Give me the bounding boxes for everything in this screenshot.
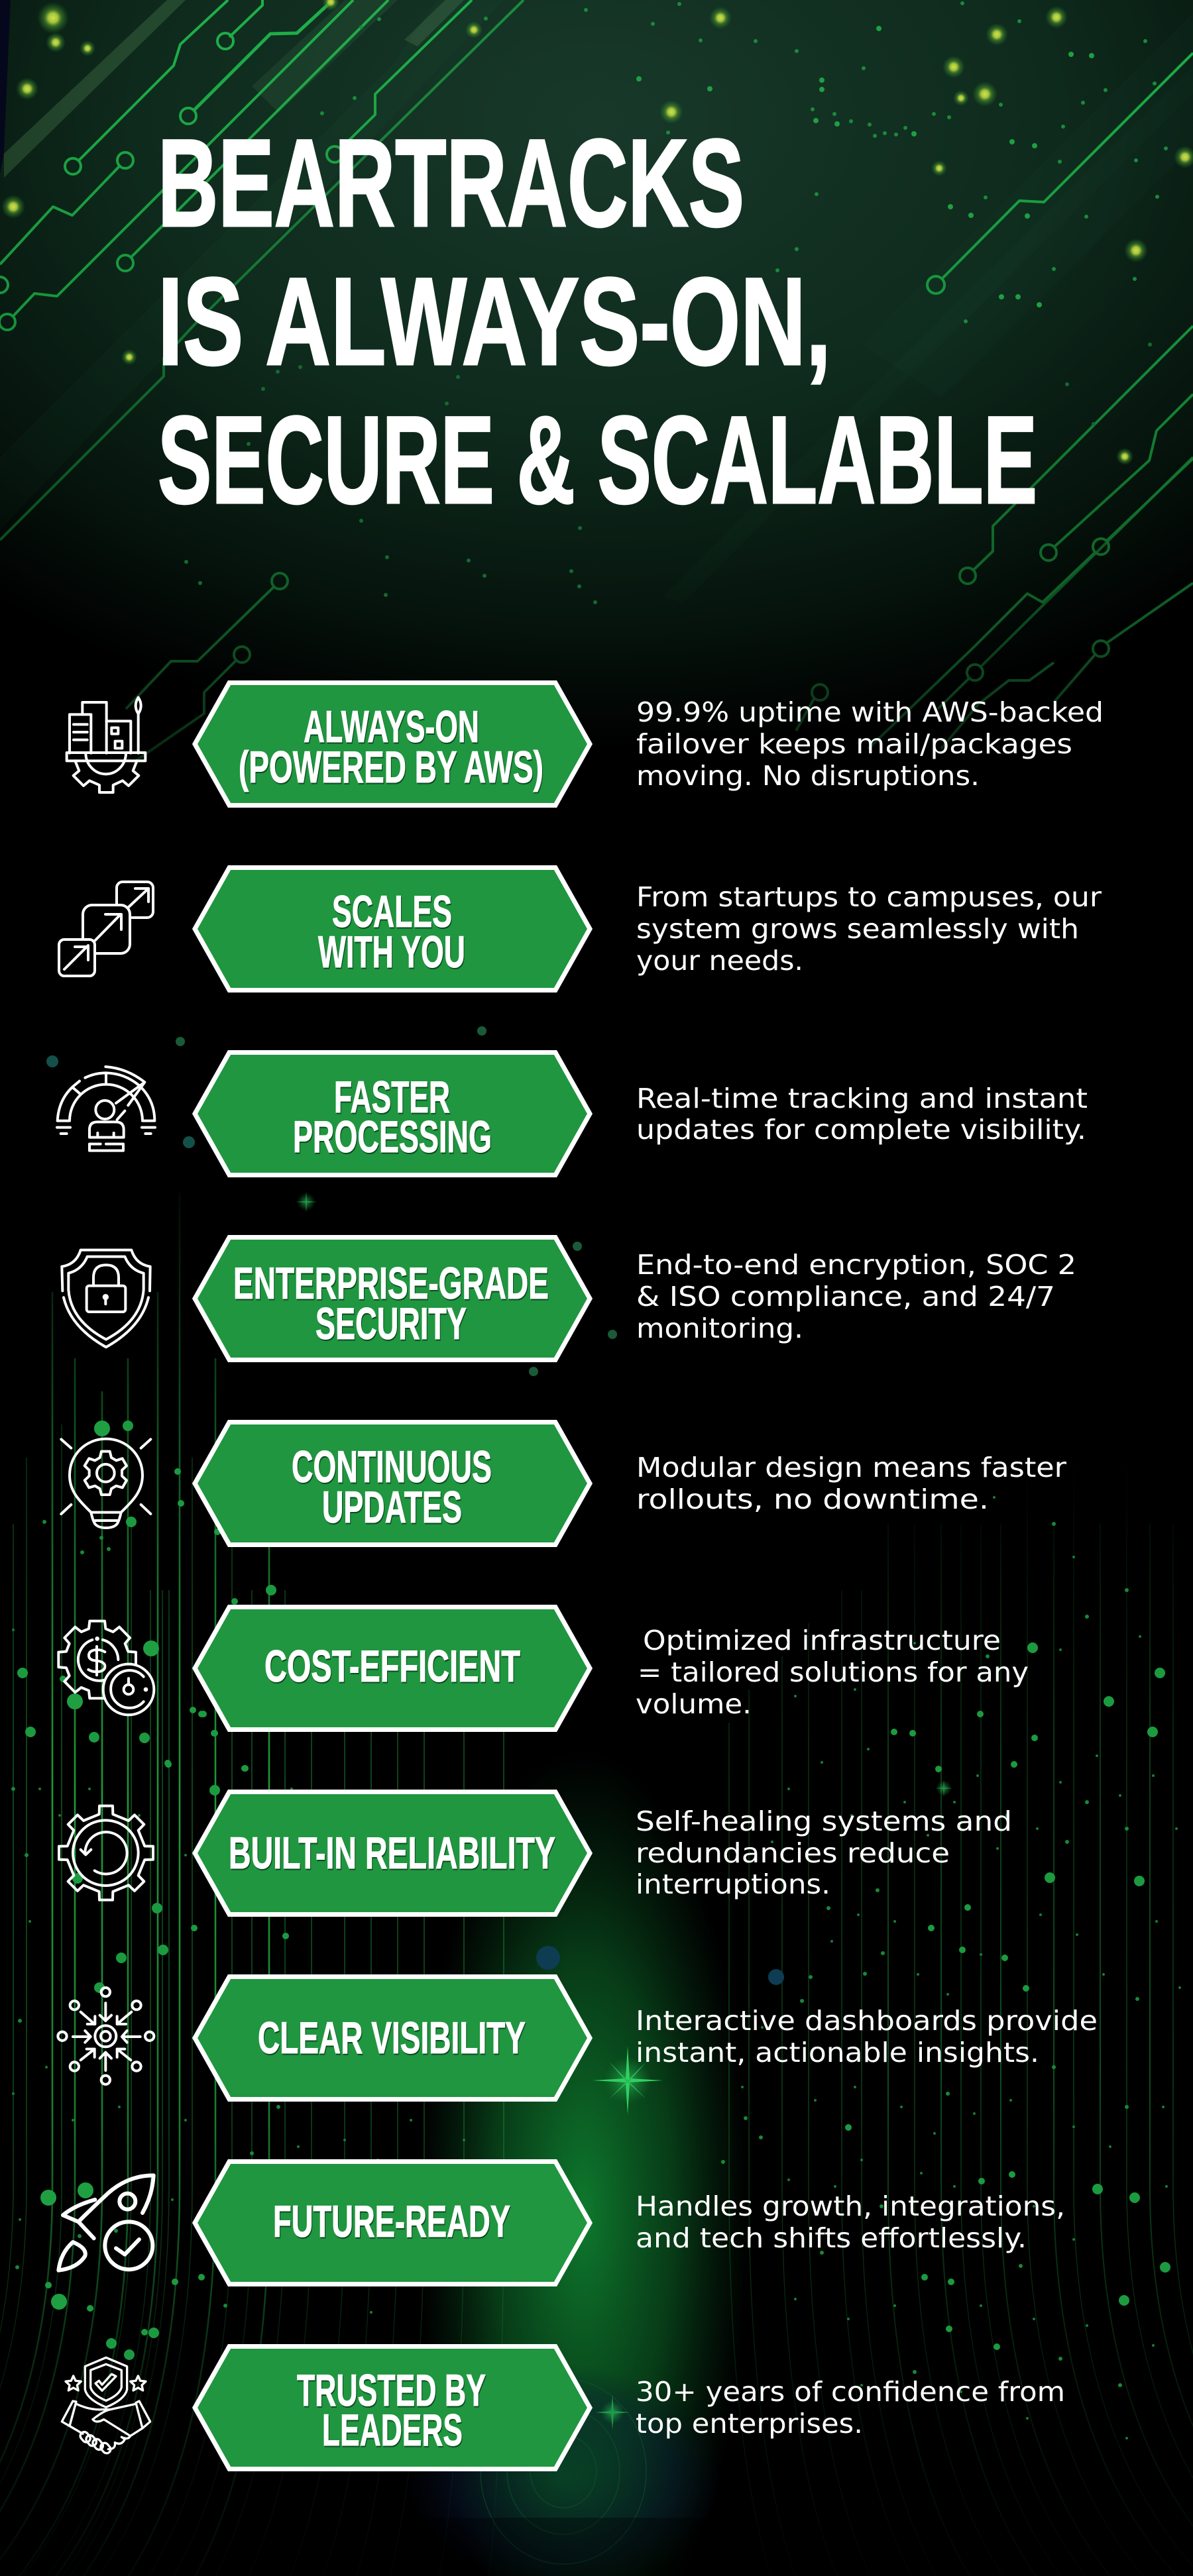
badge: WITH YOU [318,927,465,977]
description: Interactive dashboards provide [636,2005,1098,2037]
description: instant, actionable insights. [636,2037,1039,2068]
description: From startups to campuses, our [636,881,1102,913]
icon: shield with padlock [62,1250,150,1347]
icon: rocket with check badge [58,2175,154,2271]
row: faster processing [57,1052,1088,1175]
description: 99.9% uptime with AWS-backed [636,696,1104,728]
icon: factory on gear [67,698,145,792]
description: Modular design means faster [636,1452,1066,1483]
badge: (POWERED BY AWS) [239,742,543,792]
description [636,1805,1012,1900]
badge: BUILT-IN RELIABILITY [229,1828,555,1878]
description: Real-time tracking and instant [636,1083,1088,1114]
description [636,1249,1076,1344]
row: continuous updates [61,1422,1066,1545]
badge [195,1607,590,1729]
background: particles, lower section [13,1031,1180,2438]
description: system grows seamlessly with [636,913,1079,945]
badge [195,1052,590,1175]
badge [195,682,590,806]
badge: SECURITY [315,1299,467,1349]
description: redundancies reduce [636,1837,950,1869]
background: circuit traces and nodes [0,0,1193,761]
description [636,1452,1066,1515]
description [636,2005,1098,2068]
background: green sparkle stars [296,1191,952,2430]
background: glowing particles, top section [1,0,1193,602]
icon: converging arrows to target [58,1988,154,2084]
title: IS ALWAYS-ON, [158,252,831,391]
description: your needs. [636,945,803,977]
description: Self-healing systems and [636,1805,1012,1837]
icon: shield, stars and handshake [62,2357,150,2455]
title [158,113,1037,529]
badge: TRUSTED BY [297,2365,486,2416]
description: updates for complete visibility. [636,1114,1086,1146]
row: trusted by leaders [62,2347,1065,2469]
row: enterprise-grade security [62,1238,1076,1360]
row: always-on [67,682,1104,806]
description: Handles growth, integrations, [636,2190,1065,2222]
description: 30+ years of confidence from [636,2376,1065,2408]
row: built-in reliability [59,1792,1012,1915]
badge [195,1977,590,2099]
description [636,1083,1088,1146]
description: & ISO compliance, and 24/7 [636,1281,1055,1313]
badge [195,1238,590,1360]
description: rollouts, no downtime. [636,1483,989,1515]
icon: expanding squares [59,882,153,976]
badge [195,1792,590,1915]
row: cost-efficient [58,1607,1029,1729]
description [636,696,1104,792]
description [636,1625,1029,1720]
badge: FASTER [334,1072,450,1122]
description: and tech shifts effortlessly. [636,2222,1027,2254]
badge: SCALES [332,886,452,937]
description: top enterprises. [636,2408,863,2440]
badge: UPDATES [322,1482,462,1532]
icon: gear with dollar and gauge [58,1621,154,1715]
description: interruptions. [636,1868,830,1900]
description: = tailored solutions for any [638,1656,1029,1688]
badge: FUTURE-READY [273,2196,510,2247]
description: Optimized infrastructure [643,1625,1001,1656]
badge: ALWAYS-ON [304,702,479,752]
badge: PROCESSING [293,1112,492,1162]
description: failover keeps mail/packages [636,728,1072,760]
badge [195,2161,590,2284]
badge: ENTERPRISE-GRADE [233,1258,549,1309]
description [636,2190,1065,2254]
background: vertical matrix lines [0,1193,1193,2576]
description [636,2376,1065,2440]
description: volume. [636,1688,752,1720]
badge [195,1422,590,1545]
icon: speedometer with person [57,1067,155,1151]
badge: CLEAR VISIBILITY [258,2013,526,2063]
row: future-ready [58,2161,1065,2284]
badge [195,868,590,990]
row: scales with you [59,868,1102,990]
description: monitoring. [636,1313,803,1344]
description: End-to-end encryption, SOC 2 [636,1249,1076,1281]
description [636,881,1102,977]
icon: gear with refresh arrow [59,1806,153,1900]
title: BEARTRACKS [158,113,744,252]
badge: COST-EFFICIENT [264,1641,520,1691]
icon: lightbulb with gear [61,1439,150,1528]
badge: CONTINUOUS [292,1442,492,1492]
badge: LEADERS [322,2405,463,2455]
row: clear visibility [58,1977,1098,2099]
badge [195,2347,590,2469]
description: moving. No disruptions. [636,760,980,792]
